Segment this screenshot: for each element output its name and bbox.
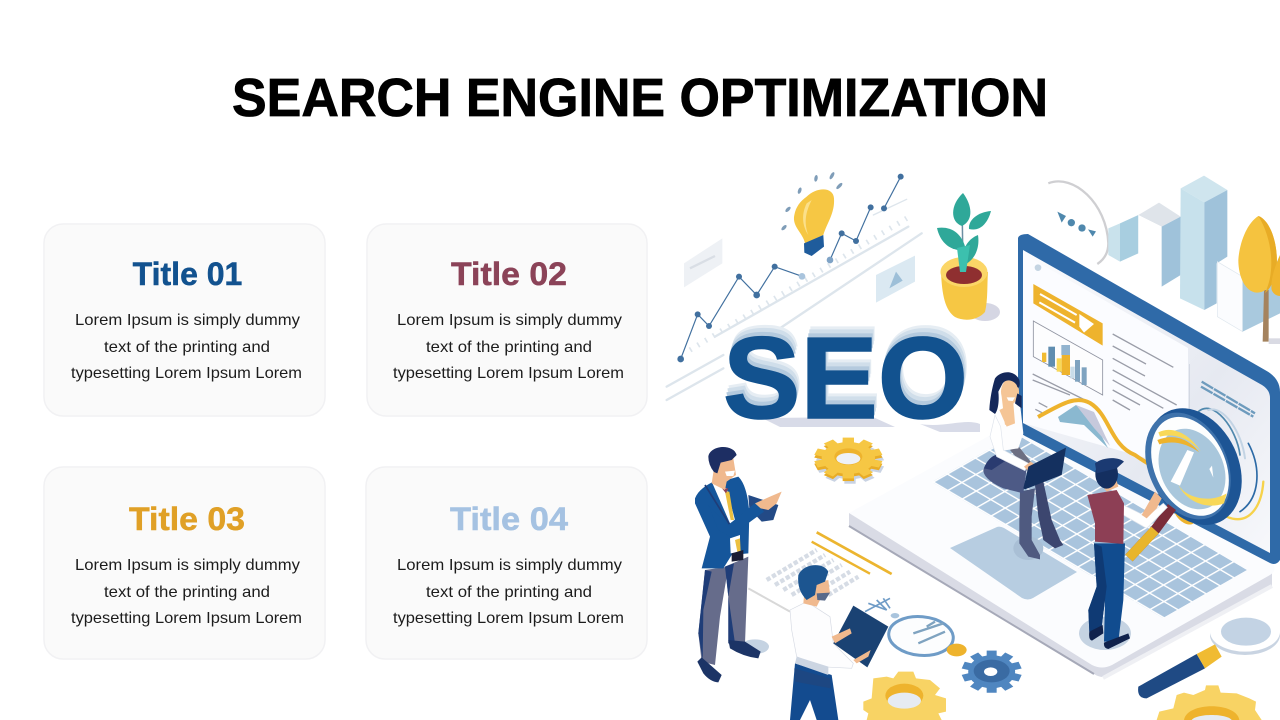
panel: title 02 — [367, 224, 647, 416]
text block: title 01 — [71, 312, 302, 382]
laptop base — [849, 420, 1275, 678]
small magnifying glass — [1138, 612, 1280, 698]
text block: title 02: typesetting Lorem Ipsum Lorem — [393, 365, 624, 382]
text block: title 03 — [71, 557, 302, 627]
woman with laptop — [983, 372, 1066, 560]
gears — [814, 438, 1262, 720]
trees — [1238, 216, 1280, 344]
text block: title 04 — [393, 557, 624, 627]
magnifier grip — [1129, 530, 1155, 558]
SEO 3D word: SEO — [723, 313, 968, 443]
heading: title 02: Title 02 — [451, 256, 567, 292]
yellow banner — [1033, 284, 1103, 346]
man in blue suit: upper body — [695, 447, 782, 568]
text block: title 04: Lorem Ipsum is simply dummy — [397, 557, 622, 574]
line chart with axis and dots — [667, 171, 922, 400]
text block: title 04: typesetting Lorem Ipsum Lorem — [393, 610, 624, 627]
panel: title 03 — [44, 467, 325, 659]
plant in pot — [937, 193, 1000, 321]
text block: title 02 — [393, 312, 624, 382]
magnifier handle — [1129, 507, 1172, 558]
text block: title 04: text of the printing and — [426, 584, 592, 601]
text block: title 01: text of the printing and — [104, 339, 270, 356]
trackpad — [950, 527, 1077, 600]
panel: title 01 — [44, 224, 325, 416]
heading: title 03: Title 03 — [129, 501, 245, 537]
big magnifying glass — [1128, 393, 1263, 541]
mini bar chart — [1033, 321, 1103, 395]
screen text lines — [1033, 264, 1255, 417]
man with magnifier — [1079, 458, 1167, 650]
icon: light bulb — [780, 171, 843, 256]
text block: title 01: Lorem Ipsum is simply dummy — [75, 312, 300, 329]
heading: title 01: Title 01 — [133, 256, 242, 292]
monitor — [1018, 234, 1280, 564]
text block: title 02: text of the printing and — [426, 339, 592, 356]
man with tablet — [790, 565, 888, 720]
document dots and yellow bars — [748, 532, 892, 612]
illustration: SEO isometric scene — [667, 171, 1280, 720]
yellow wave and small graph — [1038, 400, 1157, 468]
3D bars — [1108, 176, 1280, 332]
man in blue suit: legs — [697, 557, 769, 682]
keyboard — [932, 434, 1247, 618]
small lens and coin — [865, 598, 967, 658]
text block: title 01: typesetting Lorem Ipsum Lorem — [71, 365, 302, 382]
icon: envelope — [876, 256, 915, 303]
panel: title 04 — [366, 467, 647, 659]
text block: title 03: Lorem Ipsum is simply dummy — [75, 557, 300, 574]
text block: title 03: typesetting Lorem Ipsum Lorem — [71, 610, 302, 627]
SEO letters shadow — [762, 417, 980, 432]
speech bubble — [1048, 181, 1108, 264]
icon: note card — [684, 238, 722, 287]
heading: title 04: Title 04 — [450, 501, 568, 537]
title: SEARCH ENGINE OPTIMIZATION — [232, 68, 1048, 128]
text block: title 03: text of the printing and — [104, 584, 270, 601]
text block: title 02: Lorem Ipsum is simply dummy — [397, 312, 622, 329]
